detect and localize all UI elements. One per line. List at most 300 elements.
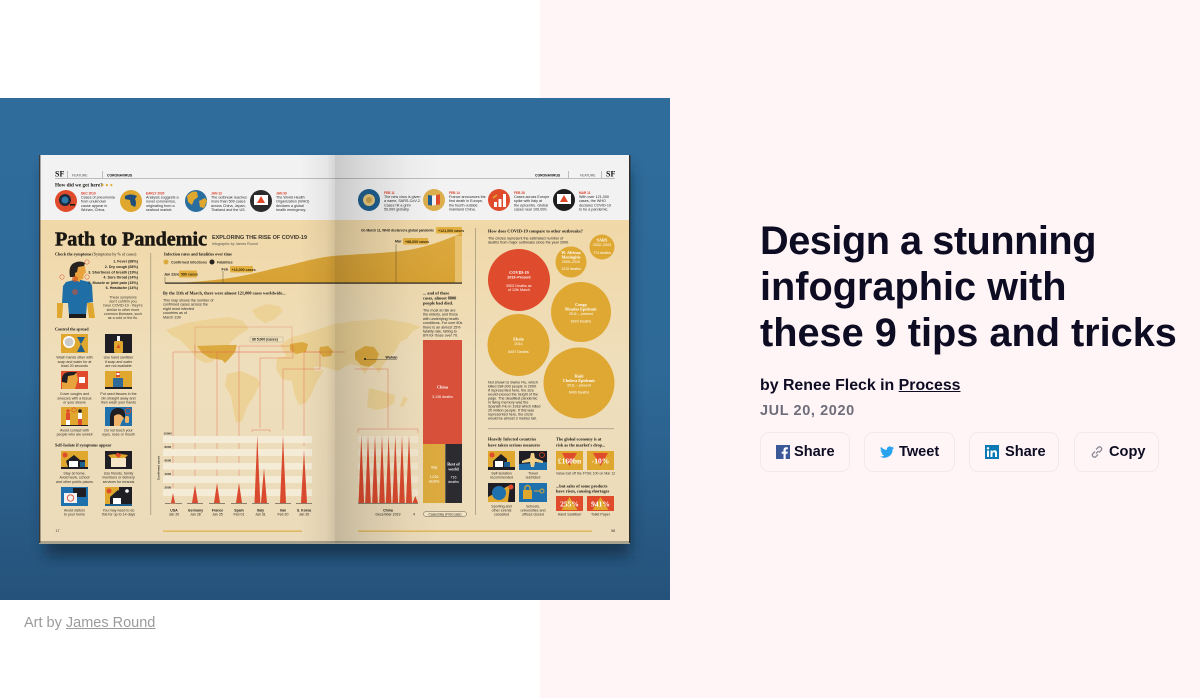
text: feb 28: Cases across Europe (514, 195, 549, 199)
chart labels: Italy (257, 508, 264, 512)
panel: measures: Heavily Infected countries (488, 436, 537, 442)
icon: monitor warning (553, 189, 575, 211)
axis labels: 6000 (164, 458, 172, 462)
bubble: haiti cholera: Haiti (574, 374, 584, 378)
subtitle (212, 235, 307, 246)
text: symptom note: don't confirm you (109, 300, 137, 304)
text: feb 28: the epicentre. Global (514, 203, 548, 207)
bubble: ebola: Ebola (513, 336, 525, 342)
caption: recommended (490, 476, 513, 480)
stacked bar: deaths: Italy (431, 466, 437, 470)
caption: other events (492, 508, 512, 512)
map connector lines (173, 327, 418, 488)
text: early 2020: novel coronavirus, (146, 200, 176, 204)
text: swine flu note: represented here, the circle (488, 412, 533, 416)
chart callouts: Feb (222, 268, 229, 272)
text: early 2020: originating from a (146, 204, 175, 208)
chart labels: Jan 25 (212, 512, 223, 516)
chart callouts: +121,000 cases (438, 229, 464, 233)
text: deaths note: there is an almost 15% (423, 325, 461, 329)
title: path to pandemic: Path to Pandemic (55, 228, 207, 250)
text: jan 30: Organization (WHO) (276, 200, 309, 204)
area chart: infections (165, 233, 462, 284)
text: swine flu note (488, 380, 540, 420)
text: feb 14 (449, 191, 486, 212)
stacked bar: deaths (423, 340, 462, 503)
chart callouts: +16,000 cases (232, 268, 256, 272)
caption (100, 392, 137, 404)
text: feb 14: the fourth outside (449, 203, 478, 207)
text: feb 11: a name, SARS-CoV-2. (384, 199, 421, 203)
page number right: 98 (611, 529, 615, 533)
bubble: sars: 774 deaths (593, 251, 611, 255)
pink background panel (540, 0, 1200, 698)
caption: Avoid contact with (60, 428, 89, 432)
spikes (170, 435, 307, 503)
text: early 2020: EARLY 2020 (146, 192, 165, 196)
text: deaths note: fatality rate, falling to (423, 330, 457, 334)
stacked bar: deaths: 3,136 deaths (432, 395, 453, 399)
caption (558, 512, 611, 516)
legend: Confirmed infections (171, 260, 207, 264)
caption (521, 504, 545, 516)
china spike chart: China (383, 508, 393, 512)
caption: Stay at home. (63, 472, 86, 476)
bubble: ebola (488, 314, 550, 376)
text: dec 2019: Cases of pneumonia (81, 196, 116, 200)
text: deaths note: ... and of these (423, 290, 449, 296)
text: feb 14: FEB 14 (449, 191, 460, 195)
text: feb 11: 50,000 globally. (384, 208, 410, 212)
caption (57, 392, 92, 404)
button: twitter tweet: Tweet (899, 444, 939, 460)
text: dec 2019: Wuhan, China. (81, 208, 105, 212)
text: deaths note: people had died. (423, 300, 453, 306)
text: swine flu note: 20 million people. If this was (488, 408, 534, 412)
pill label: Cases/day (First case) (429, 512, 461, 516)
chart callouts: +88,000 cases (405, 240, 429, 244)
outbreak heading: How does COVID-19 compare to other outbreaks? (488, 228, 583, 234)
caption: Sporting and (491, 504, 512, 508)
text: deaths note: conditions. For over 80s (423, 321, 463, 325)
button: copy link (1074, 432, 1159, 472)
caption (526, 472, 540, 480)
caption: or your sleeve (63, 400, 86, 404)
caption: restricted (526, 476, 540, 480)
caption: Cover coughs and (60, 392, 89, 396)
byline: by Renee Fleck in Process (760, 377, 960, 394)
bubble: haiti cholera: Cholera Epidemic (563, 378, 595, 383)
stacked bar: deaths: world (448, 466, 459, 472)
text: jan 13 (211, 192, 247, 212)
icon: sanitizer (105, 334, 132, 353)
wuhan label (364, 356, 397, 360)
text: swine flu note: killed 284,000 people in 2009. (488, 384, 537, 388)
caption: Use hand sanitiser (104, 356, 134, 360)
title (760, 219, 1177, 355)
stacked bar: deaths: 716 (450, 476, 456, 480)
caption: offices closed (522, 512, 544, 516)
caption: eyes, nose or mouth (102, 433, 135, 437)
caption: Self-isolation (491, 472, 512, 476)
bubble: haiti cholera (544, 348, 614, 418)
text: dec 2019: from unuknown (81, 200, 106, 204)
header right: CORONAVIRUS (535, 174, 561, 178)
chart labels: Feb 01 (234, 512, 244, 516)
chart labels: France (212, 508, 223, 512)
caption: cancelled (494, 512, 509, 516)
text: jan 30: The World Health (276, 196, 305, 200)
icon: wash hands (61, 334, 88, 353)
magazine shadow (45, 168, 630, 556)
icon: french flag (423, 189, 445, 211)
panel: economy: The global economy is at (556, 436, 602, 442)
text: outbreak intro (488, 236, 569, 245)
bubble: haiti cholera: 2011 – present (567, 384, 591, 388)
text: swine flu note: Spanish Flu in 1918 which killed (488, 404, 540, 408)
caption (57, 428, 93, 437)
text: early 2020: Analysis suggests a (146, 196, 180, 200)
chart callouts: On March 11, WHO declared a global pandemic (361, 228, 434, 232)
chart callouts: 580 cases (181, 272, 198, 276)
bubble: ebola: 6457 Deaths (508, 350, 529, 354)
text: symptom note: These symptoms (109, 296, 137, 300)
header left: CORONAVIRUS (107, 174, 133, 178)
list: symptoms: 4. Sore throat (14%) (103, 276, 139, 280)
icon: plane (519, 451, 547, 470)
panel: economy: risk as the market's drop... (556, 442, 605, 448)
text: swine flu note: Not shown is Swine Flu, which (488, 380, 538, 384)
text: jan 30: JAN 30 (276, 192, 287, 196)
icon: distance (61, 407, 88, 426)
list: symptoms: 3. Shortness of breath (19%) (88, 270, 139, 274)
caption (491, 504, 512, 516)
text: jan 30 (276, 192, 309, 212)
axis labels: 4000 (164, 472, 172, 476)
bubble: w africa meningitis: W. African (561, 250, 581, 255)
panel: control the spread: Control the spread (55, 326, 89, 332)
text: jan 13: more than 500 cases (211, 200, 246, 204)
wuhan label: Wuhan (386, 356, 397, 360)
subtitle: Infographic by James Round (212, 242, 258, 246)
bubble: w africa meningitis (556, 246, 586, 278)
bubble: congo measles: Congo (575, 302, 587, 307)
icon: house (488, 451, 515, 470)
icon: no visitors (61, 487, 88, 506)
china spike chart (358, 435, 418, 516)
caption: Hand Sanitiser (558, 512, 582, 516)
caption: if soap and water (105, 360, 133, 364)
page number left: 17 (56, 529, 60, 533)
subheading: ...but sales of some products (556, 484, 608, 488)
text: early 2020 (146, 192, 180, 212)
caption: to your home (64, 513, 85, 517)
bubble: covid-19: 2019–Present (507, 276, 531, 280)
caption (104, 356, 134, 368)
text: symptom note: as a cold or the flu. (108, 316, 138, 320)
text: jan 13: across China, Japan, (211, 204, 246, 208)
chart labels: Spain (234, 508, 244, 512)
text: map intro: March 11th (163, 315, 181, 319)
caption: Put used tissues in the (100, 392, 137, 396)
map label: 88 5,000 (cases) (252, 338, 278, 342)
text: early 2020: seafood market. (146, 208, 172, 212)
bubble: w africa meningitis: 1210 deaths (561, 267, 581, 271)
stacked bar: deaths: deaths (448, 480, 459, 484)
chart labels: Iran (280, 508, 286, 512)
caption (490, 472, 513, 480)
bubble: haiti cholera: 6400 Deaths (569, 390, 589, 394)
bubble: covid-19: 5902 Deaths as (506, 284, 532, 288)
caption: bin straight away and (102, 396, 135, 400)
bubble: congo measles: Measles Epidemic (565, 306, 597, 312)
caption (102, 472, 135, 484)
caption (102, 428, 135, 437)
text: feb 28 (514, 191, 549, 212)
subheading (556, 484, 610, 494)
magazine pages (39, 155, 630, 544)
caption: Value lost off the FTSE 100 on Mar 12 (556, 472, 615, 476)
legend: Fatalities (217, 260, 233, 264)
bubble: congo measles: 6924 Deaths (571, 320, 591, 324)
chart callouts: Mar (395, 240, 402, 244)
text: mar 11: MAR 11 (579, 191, 591, 195)
text: deaths note (423, 290, 463, 338)
text: map intro: confirmed cases across the (163, 303, 208, 307)
baselines (165, 502, 312, 504)
axis labels: 10000 (164, 432, 172, 436)
text: jan 13: JAN 13 (211, 192, 222, 196)
panel: self-isolate (55, 442, 135, 517)
panel: economy (556, 436, 615, 516)
text: swine flu note: would exceed the height of the (488, 392, 538, 396)
text: symptom note: have COVID-19 - they're (103, 304, 143, 308)
icon: globe (185, 190, 207, 212)
caption: Avoid work, school (60, 476, 90, 480)
caption: universities and (521, 508, 545, 512)
text: feb 11: The new virus is given (384, 195, 420, 199)
stacked bar: deaths: Rest of (447, 462, 460, 466)
chart labels: Jan 28 (190, 512, 201, 516)
text: feb 28: FEB 28 (514, 191, 525, 195)
button: facebook share: Share (794, 444, 835, 460)
icon: magnifier (55, 190, 77, 212)
title: these 9 tips and tricks (760, 311, 1177, 355)
header left: How did we get here? (55, 182, 103, 188)
caption: are not available (105, 364, 132, 368)
header left (55, 170, 335, 188)
caption: people who are unwell (57, 433, 93, 437)
pill label (424, 512, 466, 516)
timeline right (358, 189, 611, 212)
tile: toilet paper: 941% (591, 500, 610, 508)
panel: symptoms: Check the symptoms (Symptoms by % of cases) (55, 252, 137, 256)
axis labels: 8000 (164, 445, 172, 449)
map label (250, 337, 283, 342)
bubble: sars (590, 234, 614, 260)
title: infographic with (760, 265, 1066, 309)
list: symptoms: 5. Muscle or joint pain (15%) (88, 281, 139, 285)
highlighted countries (197, 342, 379, 367)
china spike chart: 4 (413, 512, 415, 516)
text: feb 11 (384, 191, 421, 212)
chart labels: Jan 20 (169, 512, 179, 516)
text: symptom note: common illnesses, such (104, 312, 142, 316)
text: mar 11: With over 121,000 (579, 195, 609, 199)
caption: Avoid visitors (64, 508, 85, 512)
caption (64, 508, 85, 517)
icon: padlock (519, 483, 547, 502)
caption: Use friends, family (104, 472, 133, 476)
panel: control the spread (55, 326, 137, 437)
stacked bar: deaths: 1,016 (430, 475, 438, 479)
caption (56, 356, 93, 368)
text: jan 30: declares a global (276, 204, 304, 208)
caption: You may need to do (103, 508, 134, 512)
chart labels: S. Korea (297, 508, 311, 512)
text: symptom note (103, 296, 143, 320)
title: Design a stunning (760, 219, 1096, 263)
text: feb 11: FEB 11 (384, 191, 395, 195)
bubble: congo measles: 2011 – present (569, 312, 593, 316)
icon: parcel (105, 451, 132, 469)
text: swine flu note: in living memory was the (488, 400, 528, 404)
icon: fish (120, 190, 142, 212)
chart labels (169, 508, 311, 516)
text: deaths note: 8% for those over 70. (423, 334, 458, 338)
text: dec 2019: cause appear in (81, 204, 107, 208)
header right (335, 170, 615, 179)
text: swine flu note: would be almost 3 metres tall. (488, 416, 537, 420)
tile: 160bn: £160bn (558, 456, 582, 466)
text: swine flu note: If represented here, the size (488, 388, 534, 392)
legend (164, 260, 233, 264)
magazine spread image (0, 98, 670, 600)
caption: art credit: Art by James Round (24, 615, 155, 631)
text: deaths note: the elderly, and those (423, 313, 458, 317)
icon: do not touch face (105, 407, 132, 426)
text: deaths note: cases, almost 8800 (423, 296, 456, 300)
text: jan 13: Thailand and the US. (211, 208, 246, 212)
footer lines (163, 530, 592, 532)
bubble: sars: SARS (597, 238, 608, 242)
icon: bin (105, 371, 132, 389)
spike chart (156, 432, 312, 516)
caption: Do not touch your (104, 428, 133, 432)
caption: members or delivery (102, 476, 135, 480)
caption: Travel (528, 472, 538, 476)
text: feb 14: first death in Europe, (449, 199, 483, 203)
caption: Toilet Paper (591, 512, 611, 516)
text: map intro: countries as of (163, 311, 188, 315)
chart labels: Germany (188, 508, 203, 512)
timeline left (55, 190, 309, 212)
text: symptom note: similar to other more (107, 308, 139, 312)
text: swine flu note: page. The deadliest pandemic (488, 396, 537, 400)
button: copy link: Copy (1109, 444, 1145, 460)
caption: least 20 seconds (61, 364, 88, 368)
icon: house at night (105, 487, 132, 506)
text: feb 14: France announces the (449, 195, 486, 199)
text: mar 11 (579, 191, 611, 212)
caption: services for errands (103, 480, 134, 484)
text: feb 14: mainland China. (449, 208, 476, 212)
icon: sports (488, 483, 515, 502)
button: facebook share (760, 432, 850, 472)
panel: symptoms (55, 252, 143, 320)
text: mar 11: declares COVID-19 (579, 203, 611, 207)
text: feb 11: Cases hit a grim (384, 203, 411, 207)
spine shading (39, 155, 630, 543)
icon: bars (488, 189, 510, 211)
caption: soap and water for at (58, 360, 91, 364)
text: map intro: This map shows the number of (163, 298, 214, 302)
text: feb 28: spike with Italy at (514, 199, 542, 203)
bubble: w africa meningitis: 2009–2010 (562, 260, 580, 264)
chart labels: Feb 20 (278, 512, 288, 516)
axis labels: 2000 (164, 486, 172, 490)
blue backdrop (0, 98, 670, 600)
list: symptoms: 6. Headache (14%) (106, 286, 139, 290)
axis labels (156, 432, 172, 490)
panel: self-isolate: Self-Isolate if symptoms appear (55, 442, 112, 448)
text: deaths note: with underlying health (423, 317, 459, 321)
bubble: covid-19: of 12th March (508, 288, 530, 292)
figure: person (57, 260, 95, 318)
text: mar 11: to be a pandemic. (579, 208, 608, 212)
stacked bar: deaths: deaths (429, 480, 440, 484)
subtitle: EXPLORING THE RISE OF COVID-19 (212, 235, 307, 241)
tile: -10%: -10% (592, 456, 609, 466)
button: twitter tweet (864, 432, 955, 472)
caption: sneezes with a tissue (57, 396, 92, 400)
date: JUL 20, 2020 (760, 403, 855, 419)
header left: ● ● ● (101, 182, 113, 188)
chart callouts: Jan 22nd (164, 272, 180, 276)
axis labels: Confirmed cases (156, 455, 160, 480)
chart callouts (164, 227, 464, 278)
text: jan 30: health emergency. (276, 208, 306, 212)
bubble: ebola: 2014 (514, 342, 522, 346)
text: mar 11: cases, the WHO (579, 199, 606, 203)
bubble: congo measles (551, 282, 611, 342)
world map (166, 304, 421, 423)
dividers (150, 228, 614, 515)
text: outbreak intro: The circles represent the estimated number of (488, 236, 564, 240)
text: feb 28: cases near 100,000. (514, 208, 547, 212)
chart labels: USA (170, 508, 178, 512)
header left: FEATURE (72, 174, 88, 178)
icon: cover coughs (61, 371, 88, 389)
text: jan 13: The outbreak reaches (211, 196, 247, 200)
icon: virus (358, 189, 380, 211)
stacked bar: deaths: China (437, 384, 449, 390)
tile: hand sanitiser: 255% (560, 500, 579, 508)
caption (56, 472, 93, 484)
map heading: By the 11th of March, there were almost 121,000 cases worldwide... (163, 290, 286, 296)
panel: measures (488, 436, 547, 516)
button: linkedin share (969, 432, 1059, 472)
caption: this for up to 14 days (102, 513, 135, 517)
list: symptoms (88, 260, 139, 290)
bubble: covid-19: COVID-19 (509, 270, 529, 275)
list: symptoms: 1. Fever (88%) (113, 260, 139, 264)
text: outbreak intro: deaths from major outbreaks since the year 2000. (488, 241, 569, 245)
bubble chart (488, 234, 614, 418)
text: deaths note: The most at risk are (423, 308, 456, 312)
subheading: have risen, causing shortages (556, 488, 610, 494)
caption (102, 508, 135, 517)
